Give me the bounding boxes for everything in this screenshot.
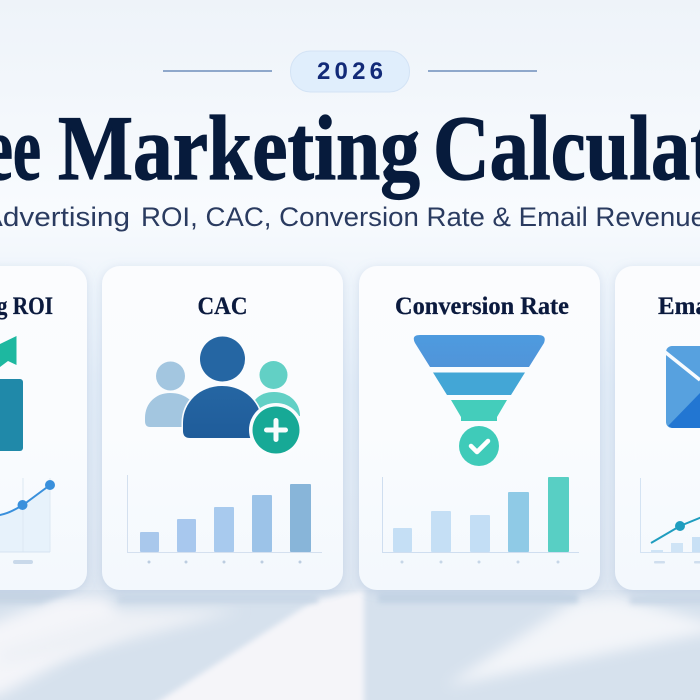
icon: growth bar and arrow [0,336,23,451]
icon: envelope [665,346,700,428]
line chart [0,478,55,564]
panel: conversion rate [359,266,600,590]
panel: email revenue [615,266,700,590]
heading: CAC: CAC [198,293,248,320]
year row [163,51,537,92]
combo chart [640,478,700,564]
year pill [290,51,410,92]
icon: customers with plus [145,336,303,457]
heading: Conversion Rate: Conversion Rate [395,293,569,320]
title [0,97,700,199]
year pill: 2026 [317,58,383,85]
icon: funnel with check [414,335,545,466]
panel: CAC [102,266,343,590]
subtitle: ROI, CAC, Conversion Rate & Email Revenue [141,202,700,232]
panel: advertising ROI [0,266,87,590]
bar chart [382,477,579,564]
title: Marketing [58,97,420,199]
bar chart [128,475,322,564]
